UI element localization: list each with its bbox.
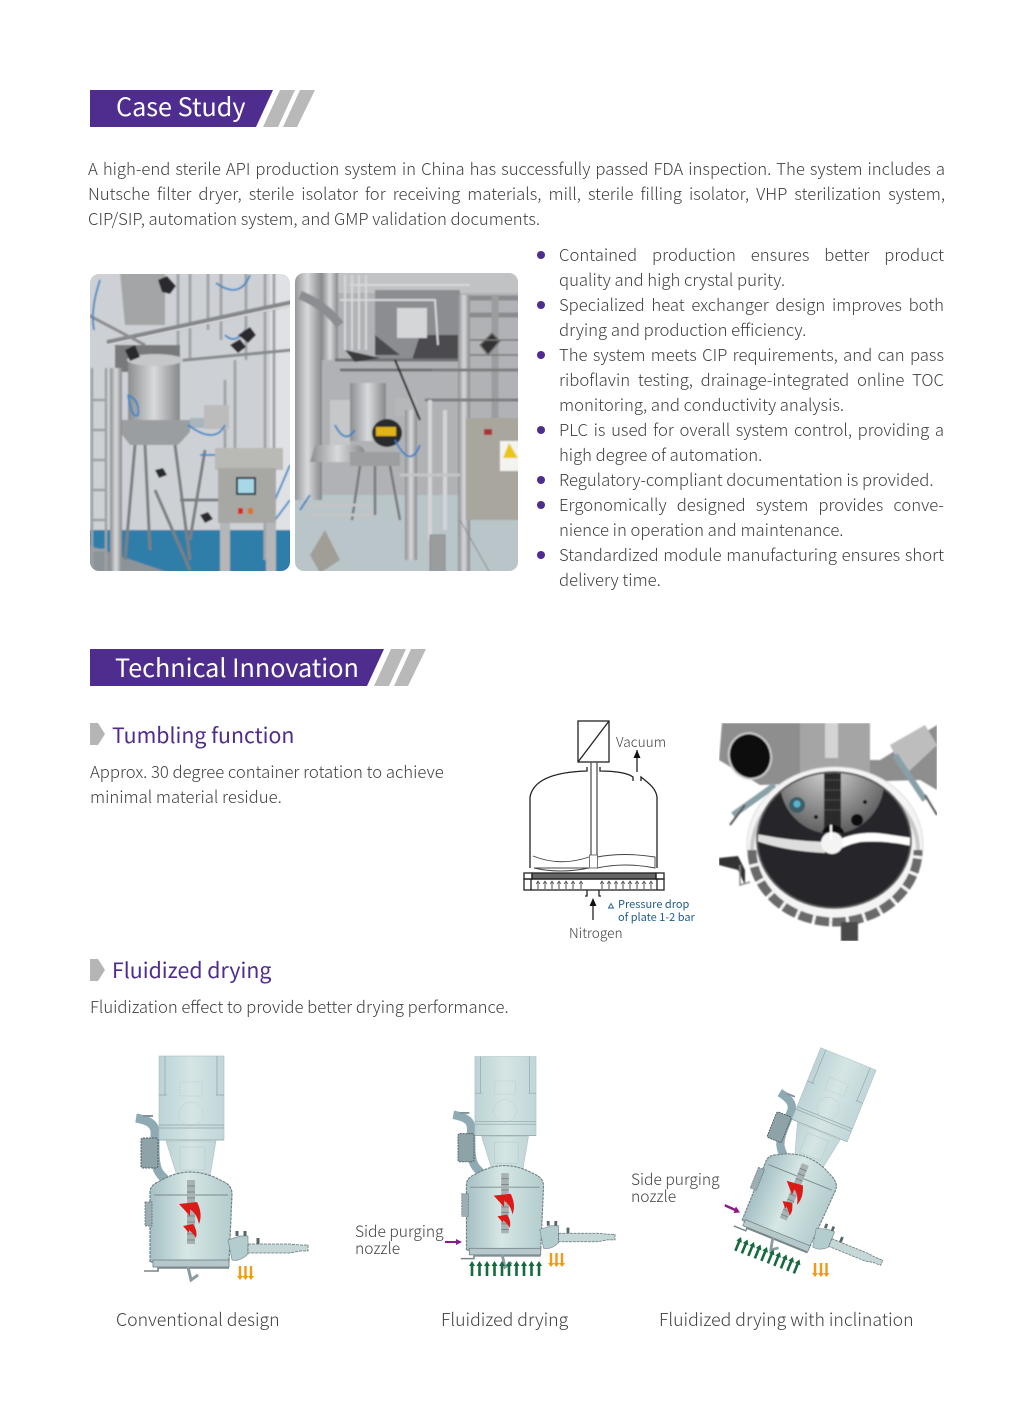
label: pressure drop: Pressure drop: [618, 896, 689, 912]
label: side purging nozzle, right: [631, 1168, 720, 1207]
text: fluidized drying description: Fluidization effect to provide better drying performance.: [90, 994, 509, 1018]
illustration: conventional design vessel: [136, 1056, 308, 1280]
photo: open vessel interior looking up: [719, 723, 937, 941]
label: Nitrogen: Nitrogen: [569, 922, 623, 942]
subheading: Fluidized drying: Fluidized drying: [112, 954, 271, 985]
text: tumbling description: [90, 759, 444, 808]
photo: filter dryer with control panel: [88, 272, 292, 573]
heading: Technical Innovation: Technical Innovation: [115, 649, 359, 685]
caption: Conventional design: Conventional design: [116, 1306, 280, 1332]
label: side purging nozzle, right: Side purging: [631, 1168, 720, 1190]
bullet list: riboflavin testing, drainage-integrated online TOC: [559, 367, 944, 391]
photo: filter dryer installation with electrical cabinet: [293, 271, 520, 573]
text: tumbling description: minimal material residue.: [90, 784, 282, 808]
label: pressure drop: of plate 1-2 bar: [618, 909, 695, 925]
bullet list: Ergonomically designed system provides conve-: [559, 492, 944, 516]
label: pressure drop: [618, 896, 695, 925]
label: side purging nozzle, centre: Side purging: [355, 1220, 444, 1242]
arrow: side purging inclined: [724, 1204, 740, 1213]
bullet list: quality and high crystal purity.: [559, 267, 785, 291]
intro paragraph: [88, 156, 945, 230]
label: side purging nozzle, centre: [355, 1220, 444, 1259]
intro paragraph: CIP/SIP, automation system, and GMP validation documents.: [88, 206, 540, 230]
arrows: inclined bottom nitrogen flow: [733, 1236, 802, 1275]
label: Vacuum: Vacuum: [616, 731, 666, 751]
bullet list: Specialized heat exchanger design improves both: [559, 292, 944, 316]
bullet list: Regulatory-compliant documentation is provided.: [559, 467, 934, 491]
caption: Fluidized drying: Fluidized drying: [441, 1306, 568, 1332]
icon: tumbling function marker: [90, 723, 105, 745]
heading banner: Case Study: [90, 90, 315, 127]
intro paragraph: A high-end sterile API production system in China has successfully passed FDA inspection. The system includes a: [88, 156, 945, 180]
caption: Fluidized drying with inclination: Fluidized drying with inclination: [659, 1306, 914, 1332]
bullet list: Contained production ensures better product: [559, 242, 944, 266]
bullet list: nience in operation and maintenance.: [559, 517, 843, 541]
bullet list: drying and production efficiency.: [559, 317, 806, 341]
bullet list: monitoring, and conductivity analysis.: [559, 392, 844, 416]
bullet list: The system meets CIP requirements, and can pass: [559, 342, 944, 366]
text: tumbling description: Approx. 30 degree container rotation to achieve: [90, 759, 444, 783]
diagram: tumbling vessel cross-section: [524, 721, 664, 920]
subheading: Tumbling function: Tumbling function: [112, 719, 294, 750]
illustration: fluidized drying vessel: [445, 1057, 615, 1276]
bullet list: PLC is used for overall system control, providing a: [559, 417, 944, 441]
illustration: fluidized drying vessel with inclination: [724, 1040, 948, 1290]
bullet list: delivery time.: [559, 567, 661, 591]
heading banner: Technical Innovation: [90, 649, 426, 686]
intro paragraph: Nutsche filter dryer, sterile isolator for receiving materials, mill, sterile filling isolator, VHP sterilization system,: [88, 181, 945, 205]
arrow: side purging: [445, 1239, 462, 1245]
icon: fluidized drying marker: [90, 959, 105, 981]
heading: Case Study: Case Study: [116, 88, 246, 124]
label: side purging nozzle, centre: nozzle: [355, 1237, 400, 1259]
bullet markers: [537, 251, 545, 559]
bullet list: Standardized module manufacturing ensures short: [559, 542, 944, 566]
bullet list: high degree of automation.: [559, 442, 762, 466]
arrows: bottom nitrogen flow: [469, 1261, 542, 1276]
bullet list: [559, 242, 944, 591]
label: side purging nozzle, right: nozzle: [631, 1185, 676, 1207]
